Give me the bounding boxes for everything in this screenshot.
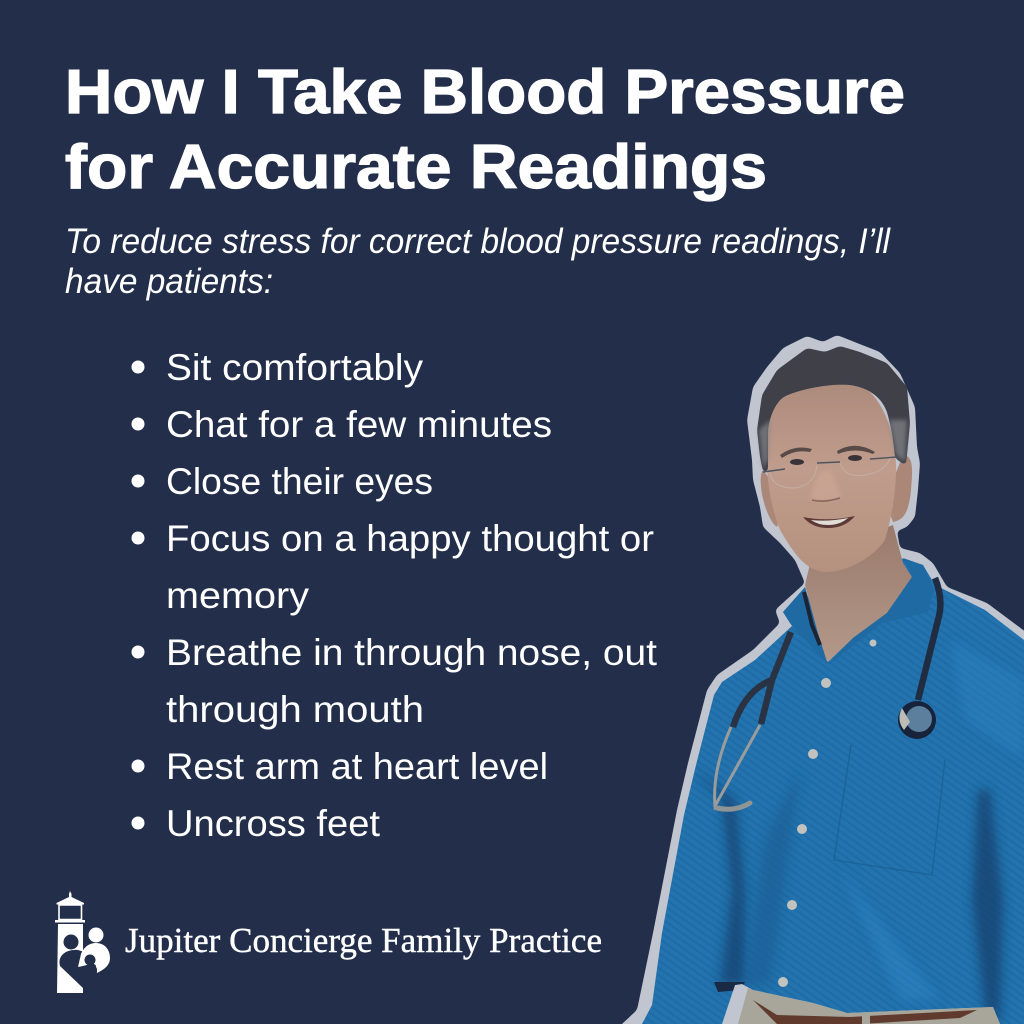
hair: [757, 346, 910, 472]
bullet list: Focus on a happy thought or: [166, 517, 654, 559]
eyes: [790, 459, 804, 465]
bullet list: Close their eyes: [166, 460, 433, 502]
title: [65, 58, 905, 202]
bullet list: through mouth: [166, 688, 424, 730]
eyebrows: [780, 446, 875, 458]
pocket: [834, 745, 945, 875]
bullet list: Chat for a few minutes: [166, 403, 552, 445]
title: How I Take Blood Pressure: [65, 58, 905, 127]
belt: [753, 1000, 977, 1024]
trousers: [738, 988, 1000, 1024]
mouth: [803, 516, 855, 528]
shirt shading: [695, 640, 1024, 1024]
face: [767, 384, 896, 572]
photo: doctor with stethoscope: [600, 335, 1024, 1024]
bullet list: memory: [166, 574, 309, 616]
chest piece: [898, 701, 936, 739]
bullet list: [132, 346, 658, 844]
subtitle: [65, 222, 891, 301]
neck: [805, 525, 912, 662]
photo outline: [600, 335, 1024, 1024]
title: for Accurate Readings: [65, 133, 767, 202]
subtitle: have patients:: [65, 262, 273, 301]
bullet list: Rest arm at heart level: [166, 745, 548, 787]
buttons: [778, 640, 876, 987]
nose: [810, 470, 842, 501]
ears: [761, 455, 912, 527]
bullet list: Sit comfortably: [166, 346, 423, 388]
glasses: [763, 457, 897, 488]
shirt: [642, 558, 1024, 1024]
subtitle: To reduce stress for correct blood pressure readings, I’ll: [65, 222, 891, 261]
stethoscope: [715, 578, 940, 809]
logo wordmark: Jupiter Concierge Family Practice: [125, 921, 602, 960]
bullet list: Uncross feet: [166, 802, 381, 844]
grey temples: [759, 420, 907, 468]
bullet list: Breathe in through nose, out: [166, 631, 658, 673]
collar: [783, 558, 934, 665]
logo: lighthouse and family: [55, 891, 110, 993]
